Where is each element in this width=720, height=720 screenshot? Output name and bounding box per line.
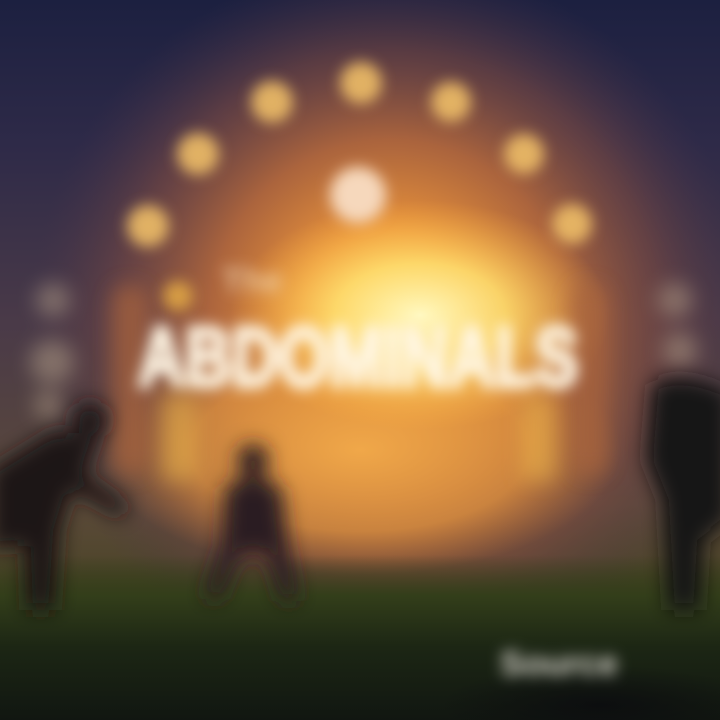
ground [0,555,720,720]
side light columns [30,283,697,419]
silhouette: centre figure [204,444,298,602]
lower glow columns [162,395,556,480]
arch side pillars [112,285,608,475]
central pale orb [330,167,386,223]
arch of glowing lights [127,62,592,311]
main title: ABDOMINALS [138,310,578,404]
dark lower vignette [440,665,720,720]
silhouette: right figure [646,378,720,610]
small heading: The [222,262,282,300]
silhouette: left figure [0,402,128,610]
caption label: Source [500,645,618,683]
